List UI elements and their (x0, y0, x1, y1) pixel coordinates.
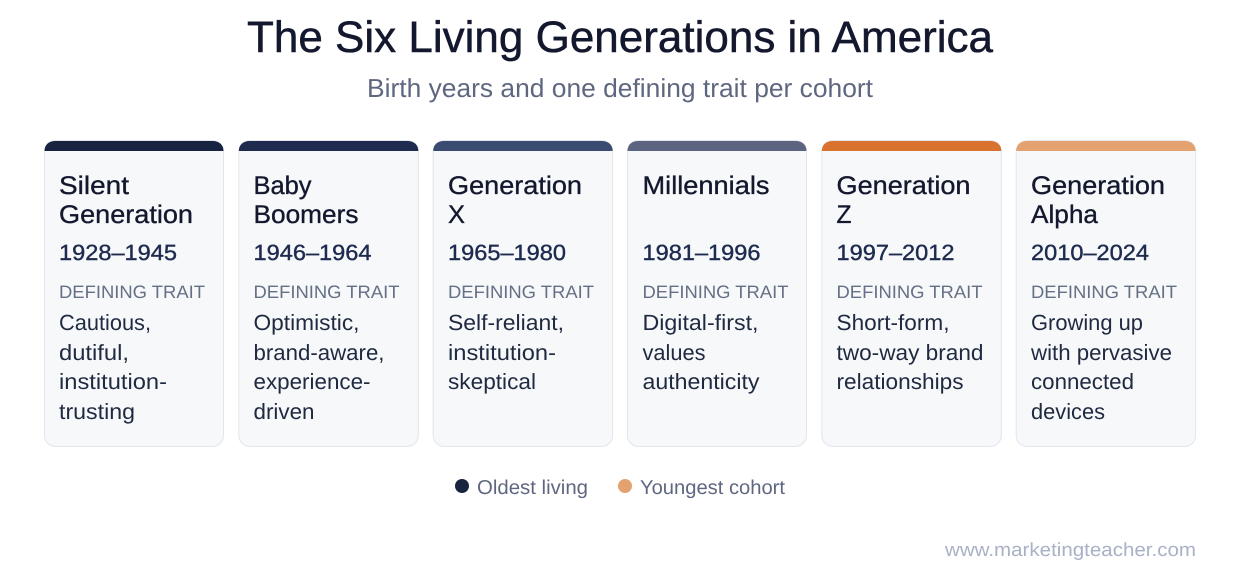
panel: Silent Generation: Cautious, (59, 310, 151, 335)
panel: Baby Boomers: Optimistic, (254, 310, 360, 335)
panel: Silent Generation: institution- (59, 369, 167, 394)
panel: Generation X: Generation (448, 172, 582, 200)
panel: Generation X: institution- (448, 340, 556, 365)
legend: oldest living: Oldest living (477, 477, 588, 499)
source footer: www.marketingteacher.com (944, 540, 1196, 561)
panel: Baby Boomers: driven (254, 399, 314, 424)
panel: Millennials: values (642, 340, 706, 365)
panel: Silent Generation: DEFINING TRAIT (59, 282, 205, 302)
panel: Generation Alpha (1016, 140, 1196, 446)
panel: Baby Boomers: DEFINING TRAIT (254, 282, 400, 302)
panel: Generation X: 1965–1980 (448, 240, 566, 265)
panel: Silent Generation: Generation (59, 201, 193, 229)
panel: Millennials: 1981–1996 (642, 240, 760, 265)
panel: Generation Z: Z (836, 201, 852, 229)
panel: Baby Boomers: brand-aware, (254, 340, 384, 365)
panel: Generation X: skeptical (448, 369, 536, 394)
panel: Generation Z: DEFINING TRAIT (836, 282, 982, 302)
panel: Generation Z: 1997–2012 (836, 240, 954, 265)
legend (455, 477, 785, 499)
panel: Silent Generation: Silent (59, 172, 129, 200)
panel: Generation Z: Short-form, (836, 310, 950, 335)
panel: Generation Alpha: devices (1031, 399, 1105, 424)
panel: Generation X (433, 140, 613, 446)
panel: Silent Generation: 1928–1945 (59, 240, 177, 265)
subtitle: Birth years and one defining trait per cohort (367, 73, 874, 103)
panel: Baby Boomers: Boomers (254, 201, 358, 229)
panel: Millennials (628, 140, 806, 446)
legend: youngest cohort: Youngest cohort (640, 477, 785, 499)
panel: Generation Z: relationships (836, 369, 964, 394)
panel: Millennials: Digital-first, (642, 310, 758, 335)
panel: Generation X: DEFINING TRAIT (448, 282, 594, 302)
panel: Generation Alpha: with pervasive (1030, 340, 1172, 365)
panel: Generation Z: two-way brand (836, 340, 984, 365)
panel: Generation Alpha: Generation (1031, 172, 1165, 200)
panel: Generation Alpha: DEFINING TRAIT (1031, 282, 1177, 302)
panel: Generation Alpha: Growing up (1031, 310, 1143, 335)
panel: Silent Generation (44, 140, 224, 446)
panel: Generation X: Self-reliant, (448, 310, 564, 335)
panel: Millennials: authenticity (642, 369, 760, 394)
panel: Baby Boomers: 1946–1964 (254, 240, 372, 265)
panel: Millennials: DEFINING TRAIT (642, 282, 788, 302)
panel: Generation Z (822, 140, 1001, 446)
title: The Six Living Generations in America (247, 13, 994, 62)
panel: Silent Generation: trusting (59, 399, 135, 424)
panel: Generation Alpha: connected (1031, 369, 1134, 394)
panel: Baby Boomers: experience- (254, 369, 370, 394)
panel: Silent Generation: dutiful, (59, 340, 129, 365)
panel: Baby Boomers: Baby (254, 172, 312, 200)
panel: Generation Alpha: Alpha (1031, 201, 1099, 229)
panel: Generation Alpha: 2010–2024 (1031, 240, 1149, 265)
panel: Generation Z: Generation (836, 172, 970, 200)
panel: Generation X: X (448, 201, 465, 229)
panel: Millennials: Millennials (642, 172, 770, 200)
panel: Baby Boomers (239, 140, 418, 446)
